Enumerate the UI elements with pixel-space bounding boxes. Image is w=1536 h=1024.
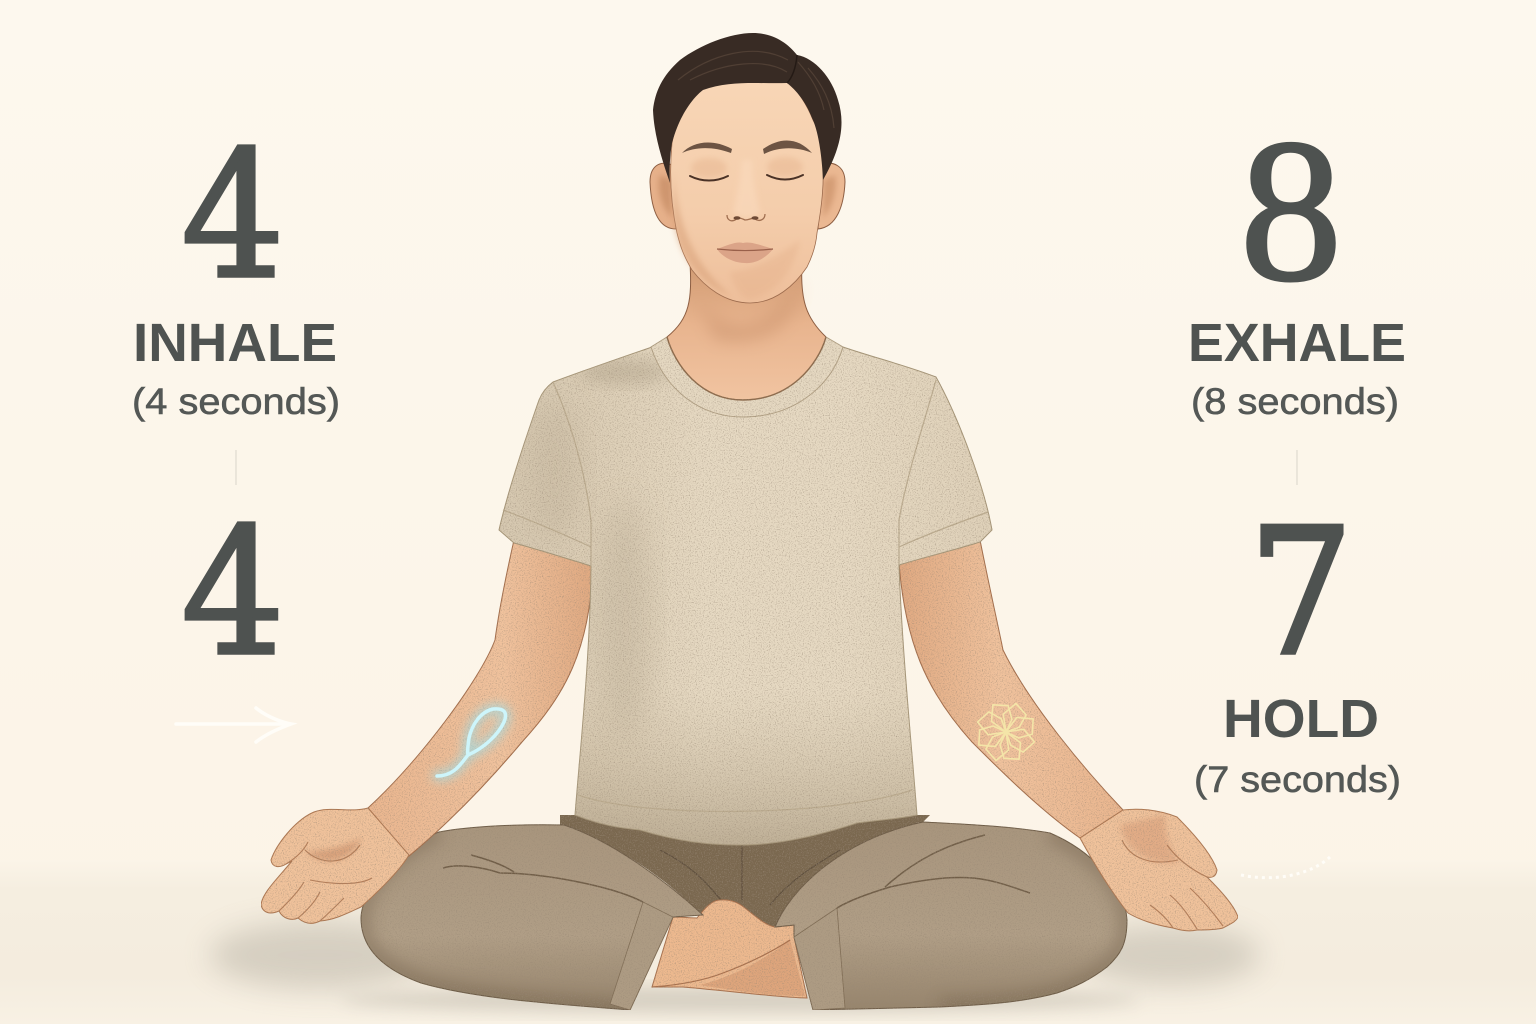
shadow under neck [580,360,670,384]
icon: blue glowing ribbon on left forearm [437,709,506,776]
right cuff [794,908,845,1010]
nose [727,214,765,221]
floor [0,860,1536,1024]
shirt collar [651,337,843,417]
hair [653,33,842,183]
arrow: white inhale arrow [176,708,291,742]
nose highlight [733,160,760,218]
chin shadow on neck [690,280,802,342]
trouser folds [443,835,1030,908]
shirt [499,347,992,845]
numeral 4 lower: 4 [181,490,285,694]
right hand [1080,809,1238,931]
thumb crease and finger lines [1122,840,1223,929]
thumb crease and finger lines [279,842,372,921]
lower foot shading [700,940,805,996]
body, clothing and limbs [261,337,1238,1010]
left ear shade [659,175,672,218]
left leg [361,825,703,1010]
left body shadow [599,500,651,740]
right ear [818,163,845,229]
palm and fingers outline [261,808,409,923]
head and neck [650,33,845,400]
panel: exhale count [1188,98,1406,422]
left arm [368,540,593,856]
lap centre seam and folds [660,845,840,905]
left ear [650,163,676,229]
floor shadow [210,921,1260,1013]
icon: golden mandala on right forearm [974,700,1038,764]
numeral 7: 7 [1248,492,1354,695]
lower shirt fade [576,728,916,844]
panel: hold count [1194,492,1401,800]
closed eyes [690,175,803,180]
right eyebrow [763,140,812,154]
sleeve shadow left [536,416,577,524]
label HOLD: HOLD [1223,689,1379,749]
foot: crossed feet [652,900,807,998]
dotted arc: hold indicator [1241,857,1330,878]
palm shading [306,838,362,861]
eyelids [691,157,803,178]
duration 8 seconds: (8 seconds) [1191,381,1399,422]
foot crossing line [652,940,790,987]
duration 4 seconds: (4 seconds) [132,381,340,422]
nostrils [734,216,758,220]
figure: meditating person [261,33,1238,1010]
trousers: lap [560,815,930,927]
left leg edge shade [361,832,630,1010]
label INHALE: INHALE [133,313,337,373]
divider left [236,450,237,485]
divider right [1296,450,1298,485]
right arm [899,540,1123,838]
left eyebrow [682,142,732,153]
right leg edge shade [940,833,1127,1007]
left cuff [610,902,673,1010]
mouth [717,242,773,263]
shirt shading [529,360,930,850]
duration 7 seconds: (7 seconds) [1194,759,1401,800]
face shading [673,170,732,297]
face [671,80,823,303]
palm shading [1120,815,1180,863]
numeral 4: 4 [181,113,285,317]
panel: inhale count [132,113,340,422]
palm and fingers outline [1080,809,1238,931]
right ear shade [823,175,836,218]
hair strands [678,51,834,128]
left hand [261,808,409,923]
label EXHALE: EXHALE [1188,313,1406,373]
neck [667,262,826,400]
right leg [775,822,1127,1010]
numeral 8: 8 [1240,98,1342,324]
chin shadow [730,240,800,299]
shirt seams [503,380,988,811]
